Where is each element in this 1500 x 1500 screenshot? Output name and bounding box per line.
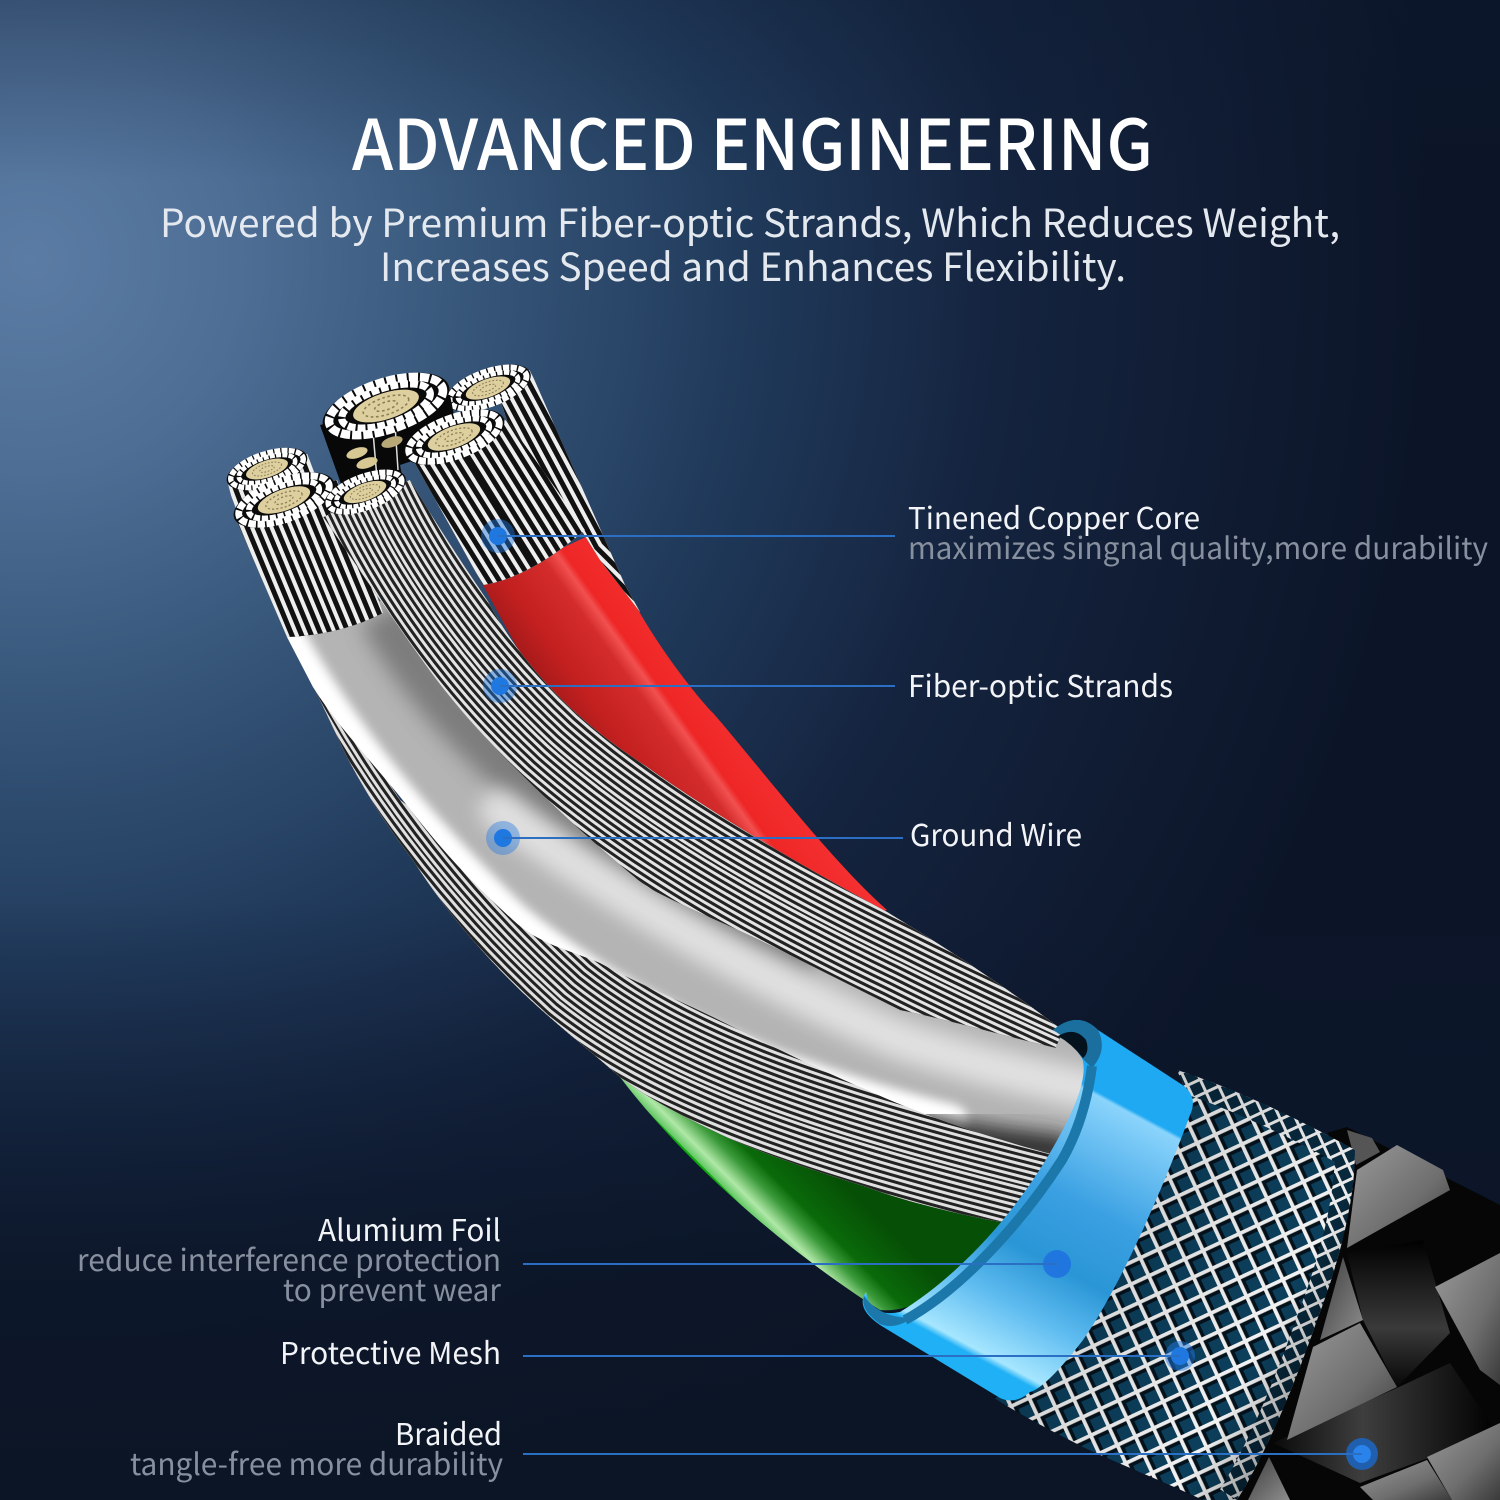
callout: aluminium foil <box>77 1206 1071 1310</box>
callout: protective mesh <box>280 1329 1195 1373</box>
strand end: center front <box>318 460 412 524</box>
left front strand bundle <box>284 500 340 635</box>
subtitle: Increases Speed and Enhances Flexibility. <box>380 237 1126 293</box>
red wire <box>483 535 887 950</box>
white ground wire <box>280 590 1100 1170</box>
back center core <box>320 395 460 495</box>
callout: tinned copper core <box>481 494 1488 568</box>
subtitle <box>160 193 1340 293</box>
callout: fiber-optic strands <box>483 662 1173 706</box>
callout: tinned copper core: Tinened Copper Core <box>908 494 1200 538</box>
title: ADVANCED ENGINEERING <box>352 90 1153 191</box>
callout: aluminium foil: Alumium Foil <box>318 1206 501 1250</box>
fiber-optic strand bundle <box>367 497 1060 1038</box>
strand end: top right <box>439 355 537 421</box>
aluminium foil ring <box>863 1020 1193 1400</box>
strand end: left front <box>227 461 341 539</box>
front right strand bundle <box>454 437 540 575</box>
callout: protective mesh: Protective Mesh <box>280 1329 501 1373</box>
callout: braided <box>130 1410 1378 1484</box>
callout: aluminium foil: reduce interference protection <box>77 1236 501 1280</box>
callout: ground wire: Ground Wire <box>910 811 1082 855</box>
cable illustration <box>222 355 1500 1500</box>
braided sleeve <box>1220 1127 1500 1500</box>
subtitle: Powered by Premium Fiber-optic Strands, Which Reduces Weight, <box>160 193 1340 249</box>
left back strand bundle <box>267 469 290 530</box>
top right strand bundle <box>488 388 640 620</box>
callout: braided: Braided <box>395 1410 502 1454</box>
lower strand bundle <box>316 691 1050 1222</box>
strand end: back center <box>315 359 457 453</box>
callout: ground wire <box>486 811 1082 855</box>
callout: aluminium foil: to prevent wear <box>283 1266 501 1310</box>
green wire <box>620 1077 1030 1310</box>
strand end: front right <box>397 398 511 476</box>
strand end: left back <box>222 439 312 499</box>
callout: braided: tangle-free more durability <box>130 1440 503 1484</box>
callout: tinned copper core: maximizes singnal quality,more durability <box>908 524 1488 568</box>
callout: fiber-optic strands: Fiber-optic Strands <box>908 662 1173 706</box>
protective mesh <box>980 1060 1370 1500</box>
